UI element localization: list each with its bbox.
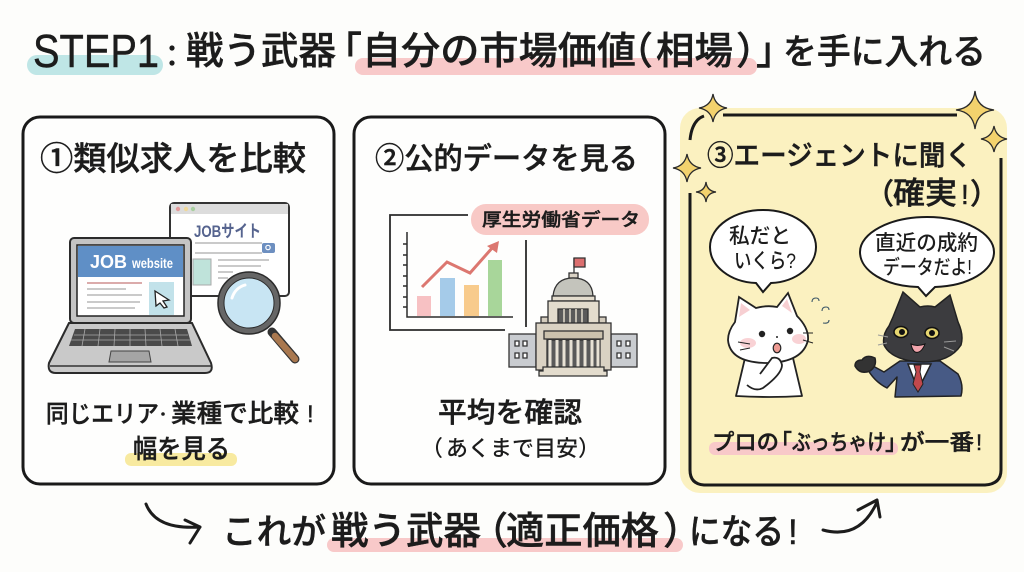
panel: ask an agent [673,91,1007,493]
speech bubble: white cat: 私だと [729,225,791,248]
icon: laptop: website [131,255,173,271]
heading: panel 3 [707,140,999,211]
text: compare note: 業種で比較 [171,400,299,428]
arrow: right [823,500,880,532]
heading: panel 2: ②公的データを見る [375,143,638,176]
highlighted text: see the range: 幅を見る [133,434,230,464]
title [27,25,986,77]
conclusion text [222,511,798,553]
heading: panel 3: （ [865,179,894,211]
label: MHLW data [471,204,649,235]
title: を手に入れる [783,33,986,72]
text: check the average: 平均を確認 [438,397,582,428]
speech bubble: black cat: 直近の成約 [875,232,978,255]
text: compare note: 同じエリア [46,401,159,428]
icon: sparkles [673,91,1007,202]
highlighted text: pro's frank opinion: が一番 [900,430,974,455]
text: compare note: ! [307,401,314,428]
highlighted text: pro's frank opinion: ぶっちゃけ [792,430,886,455]
chart: rising bars [390,215,526,330]
title: ） [736,31,774,73]
icon: government building [509,258,637,376]
text: only a guide: （ [421,436,443,461]
conclusion text: になる [689,513,784,552]
speech bubble: white cat: いくら? [734,250,796,273]
title: 自分の市場価値 [362,31,636,73]
title: 」 [756,31,794,73]
heading: panel 1: ①類似求人を比較 [40,140,306,177]
title: （ [615,31,653,73]
arrow: left [146,504,200,543]
icon: magnifying glass [218,272,295,359]
conclusion text: ） [663,511,701,553]
conclusion text: 適正価格 [506,511,659,553]
icon: browser window: JOBサイト [194,222,261,241]
speech bubble: white cat [710,210,816,292]
icon: laptop: JOB [90,252,127,272]
heading: panel 3: ③エージェントに聞く [707,140,972,171]
conclusion text: （ [470,511,508,553]
icon: white cat [728,293,829,397]
text: compare note [46,400,314,428]
text: only a guide: ） [578,436,600,461]
title: 相場 [656,31,733,73]
title: 「 [324,31,362,73]
icon: laptop [49,238,212,373]
title: 戦う武器 [186,31,336,73]
highlighted text: pro's frank opinion: ! [976,430,982,455]
conclusion text: 戦う武器 [331,511,481,553]
panel: public data [354,117,665,484]
heading: panel 3: 確実 [893,176,957,211]
label: MHLW data: 厚生労働省データ [482,209,640,230]
highlighted text: pro's frank opinion: 「 [770,430,792,455]
icon: black cat in suit [855,292,962,397]
heading: panel 3: ! [961,179,969,210]
panel: similar job postings [23,117,334,484]
speech bubble: black cat [860,217,994,296]
highlighted text: pro's frank opinion: 」 [885,430,907,455]
icon: browser window [170,203,289,296]
highlighted text: pro's frank opinion: プロの [712,430,779,455]
speech bubble: black cat: データだよ! [883,255,972,279]
conclusion text: これが [222,513,326,552]
conclusion text: ! [788,513,798,552]
text: only a guide: あくまで目安 [446,436,578,461]
heading: panel 3: ） [970,179,999,211]
title: STEP1 [33,25,159,77]
highlighted text: pro's frank opinion [709,430,982,455]
